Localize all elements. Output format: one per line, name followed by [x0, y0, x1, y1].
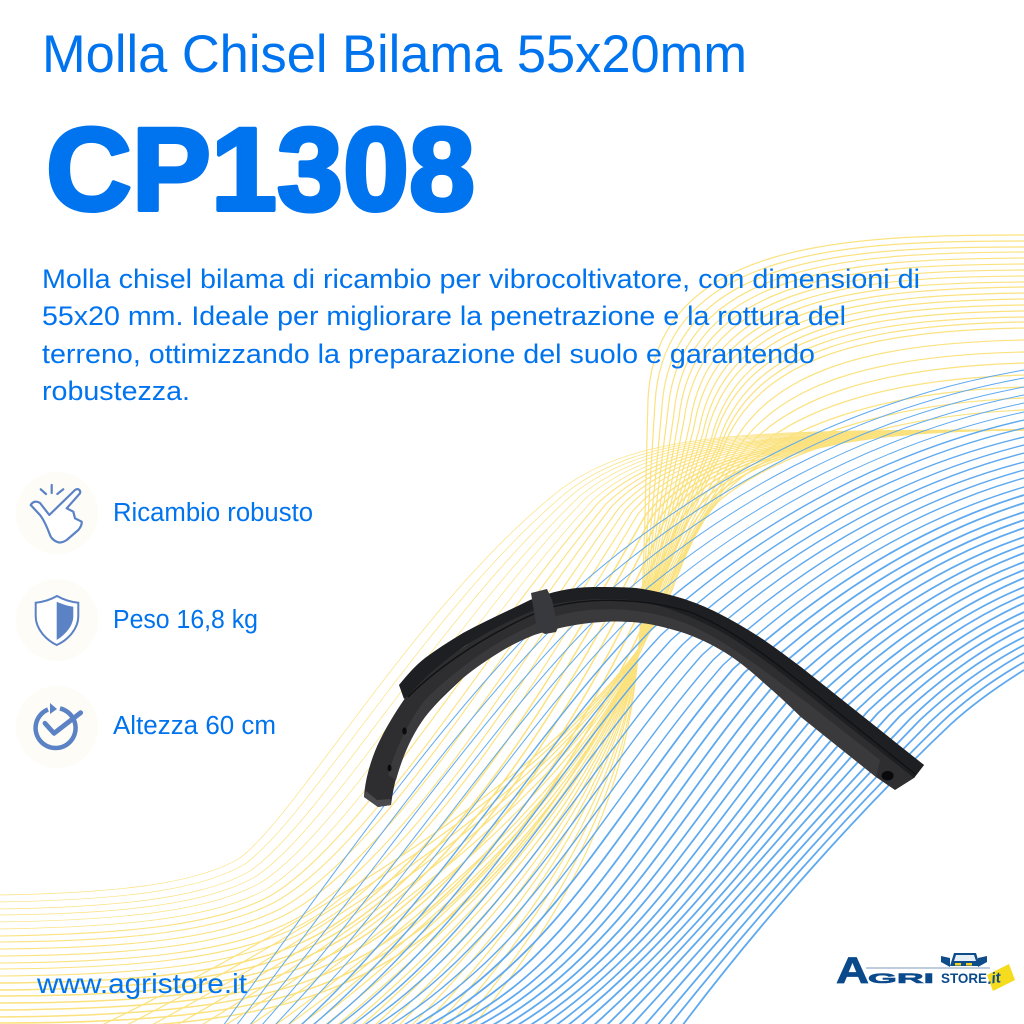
- logo .it: .it: [986, 969, 1003, 988]
- label: Peso 16,8 kg: [113, 606, 258, 634]
- feature: peso: [16, 579, 258, 661]
- description paragraph: robustezza.: [42, 376, 190, 406]
- spring upper leaf: [399, 587, 924, 778]
- icon: shield: [16, 579, 98, 661]
- feature: ricambio robusto: [16, 472, 313, 554]
- blue wave ribbon: [223, 370, 1024, 1024]
- product code: CP1308: [46, 104, 475, 236]
- logo yellow tag: [987, 964, 1015, 991]
- icon: circular check: [16, 686, 98, 768]
- label: Ricambio robusto: [113, 499, 313, 527]
- spring clamp: [531, 589, 558, 634]
- yellow wave ribbon: top right to bottom: [100, 235, 1024, 1024]
- product photo: chisel leaf spring: [364, 587, 924, 807]
- logo GRI: GRI: [868, 970, 934, 986]
- yellow wave ribbon: left to right: [0, 430, 1024, 1024]
- description paragraph: [42, 264, 920, 406]
- description paragraph: terreno, ottimizzando la preparazione del suolo e garantendo: [42, 339, 815, 369]
- logo big A: A: [836, 950, 869, 991]
- spring main blade: [364, 592, 924, 807]
- icon: pointing hand: [16, 472, 98, 554]
- spring end face: [364, 791, 391, 807]
- spring leaf seam: [408, 600, 915, 774]
- logo STORE: STORE: [941, 970, 987, 986]
- description paragraph: 55x20 mm. Ideale per migliorare la penetrazione e la rottura del: [42, 301, 846, 331]
- website url: www.agristore.it: [36, 968, 247, 999]
- logo underline: [866, 967, 990, 969]
- description paragraph: Molla chisel bilama di ricambio per vibrocoltivatore, con dimensioni di: [42, 264, 920, 294]
- logo: Agri Store: [836, 950, 1015, 991]
- label: Altezza 60 cm: [113, 712, 276, 740]
- icon: tractor: [941, 953, 987, 967]
- spring lower-face highlight: [388, 609, 880, 780]
- spring holes: [388, 727, 894, 780]
- feature: altezza: [16, 686, 276, 768]
- title: Molla Chisel Bilama 55x20mm: [42, 25, 747, 84]
